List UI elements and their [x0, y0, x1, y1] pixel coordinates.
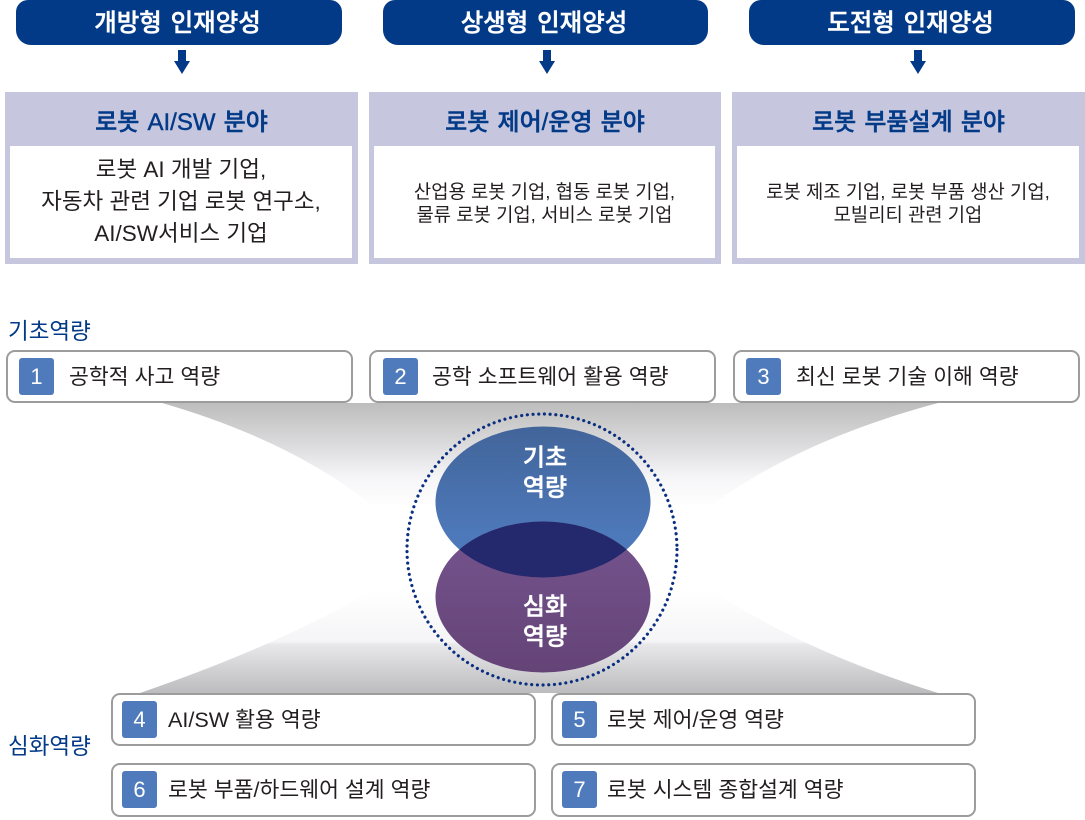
card 3 — [733, 350, 1080, 403]
venn label: advanced: 심화 — [523, 594, 567, 620]
number 2 — [383, 358, 418, 395]
venn label: basic: 기초 — [523, 444, 567, 472]
pill heading: 도전형 — [749, 0, 1075, 45]
venn label: advanced 2: 역량 — [523, 624, 567, 650]
panel body: 로봇 AI 개발 기업, — [96, 157, 266, 182]
number 3 — [746, 358, 781, 395]
number 6 — [122, 771, 157, 808]
card text: 로봇 제어/운영 역량 — [607, 707, 784, 732]
card text: 공학적 사고 역량 — [69, 364, 220, 389]
number 1 — [19, 358, 54, 395]
panel body — [10, 146, 352, 258]
pill heading: 도전형: 도전형 인재양성 — [827, 10, 994, 37]
venn label: basic 2: 역량 — [523, 474, 567, 502]
panel heading: 로봇 AI/SW 분야 — [95, 109, 268, 136]
arrow 2 — [539, 50, 555, 74]
label: 기초역량: 기초역량 — [8, 319, 91, 344]
number 5 — [562, 701, 597, 738]
dotted ring — [407, 414, 677, 685]
card 1 — [6, 350, 353, 403]
panel body — [374, 146, 715, 258]
panel body: 모빌리티 관련 기업 — [834, 204, 982, 225]
ellipse overlap — [460, 522, 626, 578]
ellipse: basic competency — [436, 426, 650, 578]
number 7: 7 — [573, 777, 586, 802]
number 5: 5 — [573, 707, 586, 732]
card text: 로봇 시스템 종합설계 역량 — [607, 777, 844, 802]
number 2: 2 — [394, 364, 407, 389]
panel: 로봇 제어/운영 분야 — [369, 92, 721, 264]
number 4: 4 — [133, 707, 146, 732]
card text: 공학 소프트웨어 활용 역량 — [432, 364, 669, 389]
card text: AI/SW 활용 역량 — [168, 707, 321, 732]
number 1: 1 — [30, 364, 43, 389]
ellipse: advanced competency — [436, 522, 650, 672]
panel: 로봇 AI/SW 분야 — [5, 92, 358, 264]
card 2 — [369, 350, 716, 403]
number 7 — [562, 771, 597, 808]
card 4 — [111, 693, 536, 746]
card 6 — [111, 763, 536, 817]
card 5 — [551, 693, 976, 746]
panel body: AI/SW서비스 기업 — [94, 221, 268, 246]
pill heading: 개방형: 개방형 인재양성 — [94, 10, 261, 37]
panel: 로봇 부품설계 분야 — [732, 92, 1085, 264]
panel body: 자동차 관련 기업 로봇 연구소, — [41, 189, 321, 214]
diagram: funnel and venn — [140, 403, 938, 693]
number 4 — [122, 701, 157, 738]
pill heading: 상생형 — [383, 0, 708, 45]
panel body: 물류 로봇 기업, 서비스 로봇 기업 — [417, 204, 672, 225]
arrow 3 — [910, 50, 926, 74]
panel heading: 로봇 제어/운영 분야 — [445, 109, 645, 136]
panel body: 산업용 로봇 기업, 협동 로봇 기업, — [414, 181, 675, 202]
pill heading: 상생형: 상생형 인재양성 — [461, 10, 627, 37]
number 3: 3 — [757, 364, 770, 389]
card text: 최신 로봇 기술 이해 역량 — [796, 364, 1019, 389]
funnel: top gradient — [162, 403, 938, 505]
arrow 1 — [174, 50, 190, 74]
label: 심화역량: 심화역량 — [8, 734, 91, 759]
panel body — [737, 146, 1079, 258]
card 7 — [551, 763, 976, 817]
card text: 로봇 부품/하드웨어 설계 역량 — [168, 777, 430, 802]
pill heading: 개방형 — [16, 0, 342, 45]
panel body: 로봇 제조 기업, 로봇 부품 생산 기업, — [766, 181, 1050, 202]
funnel: bottom gradient — [140, 590, 938, 693]
panel heading: 로봇 부품설계 분야 — [812, 109, 1005, 136]
number 6: 6 — [133, 777, 146, 802]
